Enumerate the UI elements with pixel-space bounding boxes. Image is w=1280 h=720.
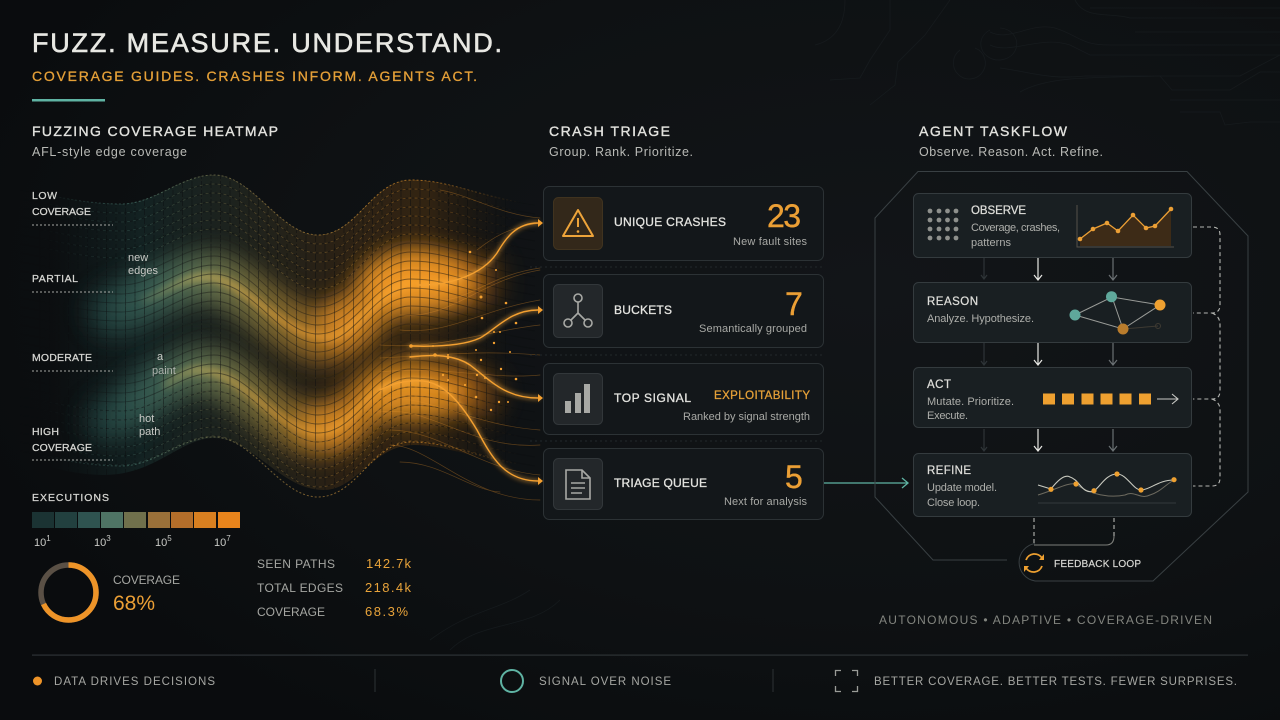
mesh annotations: hot bbox=[139, 413, 154, 425]
legend: executions: 5 bbox=[167, 534, 172, 543]
donut: coverage 68%: 68% bbox=[113, 592, 155, 615]
step: act: Execute. bbox=[927, 410, 968, 422]
chart: coverage heatmap mesh bbox=[52, 174, 514, 498]
donut: coverage 68% bbox=[41, 565, 180, 620]
legend: executions: 10 bbox=[214, 537, 226, 549]
caption: autonomous adaptive coverage-driven: AUTONOMOUS • ADAPTIVE • COVERAGE-DRIVEN bbox=[879, 613, 1212, 627]
heading: agent taskflow: AGENT TASKFLOW bbox=[919, 123, 1068, 139]
step: act bbox=[914, 368, 1192, 428]
coverage level labels: MODERATE bbox=[32, 352, 92, 364]
dashed feedback connectors bbox=[1193, 227, 1220, 486]
mesh annotations: edges bbox=[128, 265, 158, 277]
legend: executions: 1 bbox=[46, 534, 51, 543]
footer item: data drives decisions: DATA DRIVES DECISIONS bbox=[54, 676, 215, 688]
title accent rule bbox=[32, 99, 105, 102]
card: unique crashes: UNIQUE CRASHES bbox=[614, 215, 726, 229]
legend: executions: 10 bbox=[94, 537, 106, 549]
pill: feedback loop: FEEDBACK LOOP bbox=[1054, 559, 1141, 570]
diagram: node graph bbox=[1070, 291, 1166, 334]
step: reason bbox=[914, 282, 1192, 342]
stats table: COVERAGE bbox=[257, 605, 325, 619]
card: buckets: Semantically grouped bbox=[699, 323, 807, 335]
card: unique crashes bbox=[544, 186, 824, 260]
card: triage queue: Next for analysis bbox=[724, 496, 808, 508]
chart: refine curves bbox=[1038, 471, 1177, 503]
heading: fuzzing coverage heatmap bbox=[32, 123, 278, 159]
card: triage queue: 5 bbox=[785, 459, 803, 495]
legend: executions bbox=[32, 492, 240, 549]
mesh annotations: path bbox=[139, 426, 160, 438]
card: top signal bbox=[544, 364, 824, 434]
heading: fuzzing coverage heatmap: FUZZING COVERAGE HEATMAP bbox=[32, 123, 278, 139]
card: buckets: BUCKETS bbox=[614, 303, 672, 317]
coverage level labels: LOW bbox=[32, 190, 57, 202]
stats table: 218.4k bbox=[365, 580, 412, 595]
footer item: signal over noise bbox=[501, 670, 671, 692]
stats table: 68.3% bbox=[365, 604, 408, 619]
stats table bbox=[257, 556, 412, 619]
mesh annotations: a bbox=[157, 351, 164, 363]
panel: crash triage cards bbox=[530, 186, 825, 520]
feedback connectors below refine bbox=[1034, 518, 1114, 545]
queue of mutation squares bbox=[1043, 394, 1151, 404]
legend: executions: 10 bbox=[155, 537, 167, 549]
heading: crash triage bbox=[549, 123, 693, 159]
card: unique crashes: 23 bbox=[767, 198, 801, 234]
step: refine: Update model. bbox=[927, 482, 997, 494]
mesh annotations bbox=[128, 252, 176, 438]
stats table: TOTAL EDGES bbox=[257, 581, 343, 595]
step: reason: REASON bbox=[927, 296, 978, 308]
legend: executions: 10 bbox=[34, 537, 46, 549]
signal streams into triage cards bbox=[380, 190, 543, 500]
step: refine: REFINE bbox=[927, 465, 971, 477]
step: refine bbox=[914, 454, 1192, 516]
card: unique crashes: New fault sites bbox=[733, 236, 808, 248]
panel: agent taskflow frame bbox=[875, 172, 1248, 581]
legend: executions: EXECUTIONS bbox=[32, 492, 109, 504]
step: observe: Coverage, crashes, bbox=[971, 222, 1060, 234]
heading: fuzzing coverage heatmap: AFL-style edge coverage bbox=[32, 145, 187, 159]
coverage level labels: COVERAGE bbox=[32, 206, 91, 218]
coverage level labels: PARTIAL bbox=[32, 273, 78, 285]
coverage level labels: HIGH bbox=[32, 426, 59, 438]
icon: dot grid bbox=[928, 209, 958, 240]
heading: agent taskflow: Observe. Reason. Act. Refine. bbox=[919, 145, 1103, 159]
subtitle: COVERAGE GUIDES. CRASHES INFORM. AGENTS ACT. bbox=[32, 68, 477, 84]
footer item: better coverage bbox=[836, 670, 1237, 692]
heading: agent taskflow bbox=[919, 123, 1103, 159]
step: observe: patterns bbox=[971, 237, 1012, 249]
legend: executions: 3 bbox=[106, 534, 111, 543]
step: act: ACT bbox=[927, 379, 951, 391]
mesh annotations: paint bbox=[152, 365, 176, 377]
step: refine: Close loop. bbox=[927, 497, 980, 509]
donut: coverage 68%: COVERAGE bbox=[113, 573, 180, 587]
chart: observe sparkline bbox=[1077, 205, 1174, 247]
step: reason: Analyze. Hypothesize. bbox=[927, 313, 1034, 325]
coverage level labels bbox=[32, 190, 113, 460]
heading: crash triage: CRASH TRIAGE bbox=[549, 123, 670, 139]
step: act: Mutate. Prioritize. bbox=[927, 396, 1014, 408]
footer item: signal over noise: SIGNAL OVER NOISE bbox=[539, 676, 671, 688]
card: buckets: 7 bbox=[785, 286, 803, 322]
footer item: better coverage: BETTER COVERAGE. BETTER TESTS. FEWER SURPRISES. bbox=[874, 676, 1237, 688]
coverage level labels: COVERAGE bbox=[32, 442, 92, 454]
flow arrows between steps bbox=[981, 258, 1117, 451]
card: triage queue: TRIAGE QUEUE bbox=[614, 476, 707, 490]
legend: executions: 7 bbox=[226, 534, 231, 543]
card: buckets bbox=[544, 274, 824, 348]
arrow bbox=[1157, 394, 1178, 404]
arrow: triage to refine bbox=[824, 478, 908, 488]
step: observe: OBSERVE bbox=[971, 205, 1026, 217]
heading: crash triage: Group. Rank. Prioritize. bbox=[549, 145, 693, 159]
mesh annotations: new bbox=[128, 252, 148, 264]
card: triage queue bbox=[544, 448, 824, 520]
stats table: 142.7k bbox=[366, 556, 412, 571]
stats table: SEEN PATHS bbox=[257, 557, 335, 571]
card: top signal: Ranked by signal strength bbox=[683, 411, 810, 423]
title: FUZZ. MEASURE. UNDERSTAND. bbox=[32, 28, 502, 58]
footer bbox=[32, 654, 1248, 692]
card: top signal: TOP SIGNAL bbox=[614, 391, 691, 405]
card: top signal: EXPLOITABILITY bbox=[714, 390, 810, 402]
pill: feedback loop bbox=[1024, 554, 1141, 572]
step: observe bbox=[914, 194, 1192, 258]
